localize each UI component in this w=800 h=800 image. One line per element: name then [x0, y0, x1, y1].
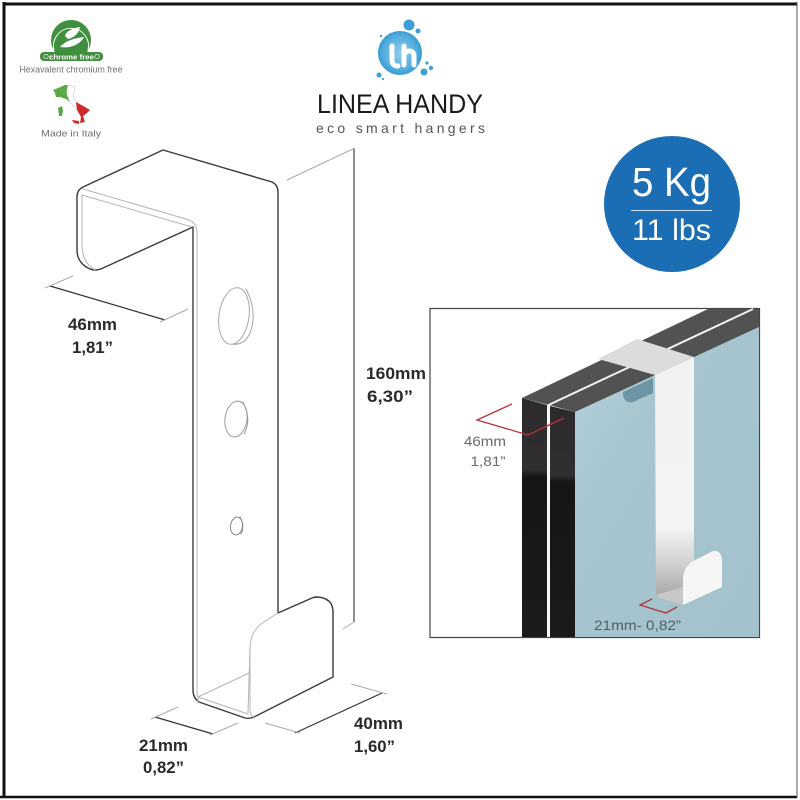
glass gap highlight: [548, 309, 753, 637]
label 40mm: 40mm: [354, 715, 403, 733]
dimension: 21mm: [139, 707, 238, 777]
label 46mm: 46mm: [68, 316, 117, 334]
badge: chrome free: [20, 20, 122, 76]
hole small: [229, 516, 244, 536]
icon: Italy map flag: [53, 85, 90, 124]
label 1,81 inches: 1,81”: [72, 339, 113, 357]
glass side faces: [522, 398, 547, 637]
brand name: LINEA HANDY: [317, 89, 483, 119]
red dimension 46mm: [477, 404, 564, 435]
hook line drawing: [77, 150, 333, 718]
red dimension 21mm: [640, 599, 677, 613]
hook outer outline: [77, 150, 333, 718]
label 46mm: 46mm: [464, 433, 506, 449]
label 6,30 inches: 6,30”: [367, 388, 413, 406]
hole medium: [223, 400, 249, 438]
label 160mm: 160mm: [366, 365, 426, 383]
label 0,82 inches: 0,82”: [143, 759, 184, 777]
icon: chrome free leaf: chrome free: [49, 52, 94, 61]
dimension: 160mm: [287, 148, 426, 629]
hook photo: [598, 339, 722, 605]
badge: made in Italy: [41, 85, 101, 140]
label 1,60 inches: 1,60”: [354, 738, 395, 756]
label 21mm: 21mm: [139, 737, 188, 755]
label 1,81 inches: 1,81”: [470, 453, 506, 469]
logo: Linea Handy: [316, 20, 485, 136]
icon: lh bubble logo: [376, 20, 433, 80]
caption: hexavalent chromium free: Hexavalent chromium free: [20, 64, 122, 76]
dimension: 46mm: [45, 276, 188, 357]
badge: load capacity: [604, 136, 740, 272]
hook inner edges: [82, 189, 278, 717]
glass top edge: [522, 309, 759, 412]
label 21mm and 0,82 inches: 21mm- 0,82”: [594, 617, 681, 633]
glass pane: [575, 327, 759, 637]
caption: made in Italy: Made in Italy: [41, 128, 101, 140]
dimension: 40mm: [265, 684, 403, 756]
tagline: eco smart hangers: [316, 120, 485, 136]
hole large: [215, 286, 253, 346]
load in pounds: 11 lbs: [632, 214, 711, 247]
load in kilograms: 5 Kg: [632, 159, 711, 205]
panel: product in use on glass: [430, 308, 760, 638]
hook shadow: [623, 378, 653, 402]
